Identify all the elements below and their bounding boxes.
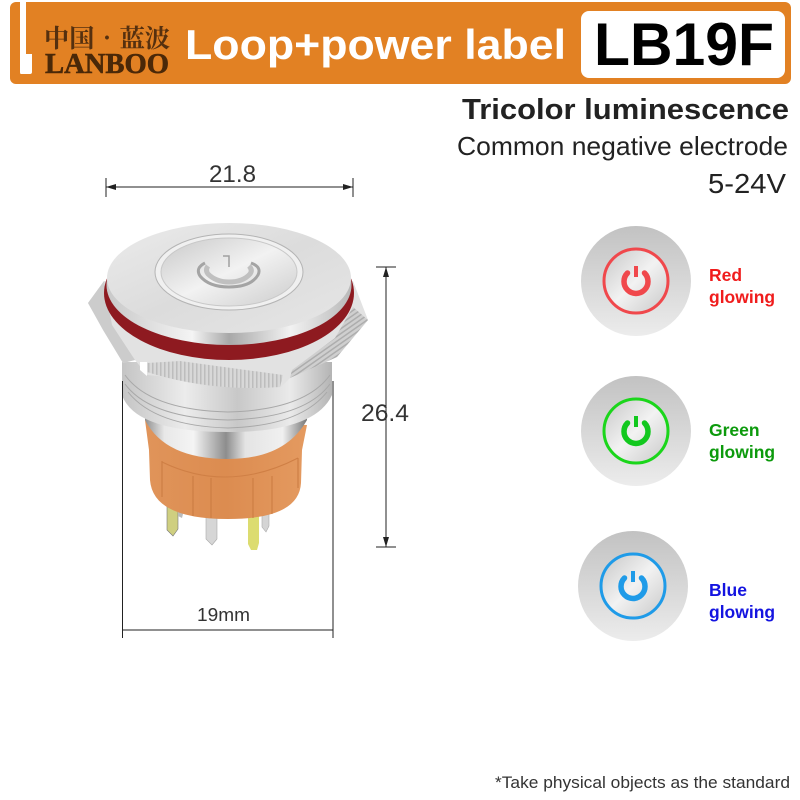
red label: Red: [709, 265, 742, 285]
blue label: Blue: [709, 580, 747, 600]
tag hook icon: [20, 2, 32, 74]
green indicator button: [581, 376, 691, 486]
model badge: LB19F: [594, 11, 774, 78]
blue label: glowing: [709, 602, 775, 622]
dimension: 19mm: 19mm: [197, 605, 250, 625]
spec voltage: 5-24V: [708, 168, 786, 199]
orange base: [145, 420, 307, 519]
LANBOO logo: [44, 19, 170, 80]
red label: glowing: [709, 287, 775, 307]
blue indicator button: [578, 531, 688, 641]
pins: [167, 505, 269, 550]
red o-ring: [104, 226, 354, 360]
power symbol: [198, 263, 259, 287]
hex nut: [88, 281, 368, 388]
dimension: width 21.8: 21.8: [209, 161, 256, 188]
spec electrode: Common negative electrode: [457, 131, 788, 161]
dimension: height 26.4: [361, 267, 409, 547]
green label: glowing: [709, 442, 775, 462]
footnote: *Take physical objects as the standard: [495, 773, 790, 792]
title: Loop+power label: [185, 21, 566, 68]
cap top face: [107, 223, 351, 333]
LANBOO logo: 中国•蓝波: [44, 19, 170, 55]
header banner: [10, 2, 791, 84]
dimension: 19mm: [122, 381, 333, 638]
thread: [122, 362, 332, 432]
product illustration: metal push button: [88, 223, 368, 550]
spec heading: Tricolor luminescence: [462, 94, 789, 126]
metal barrel: [145, 395, 307, 459]
button face: [155, 234, 303, 310]
dimension: height 26.4: 26.4: [361, 400, 409, 427]
red indicator button: [581, 226, 691, 336]
green label: Green: [709, 420, 760, 440]
cap side: [106, 225, 352, 345]
dimension: width 21.8: [106, 161, 353, 197]
LANBOO logo: LANBOO: [45, 48, 169, 80]
